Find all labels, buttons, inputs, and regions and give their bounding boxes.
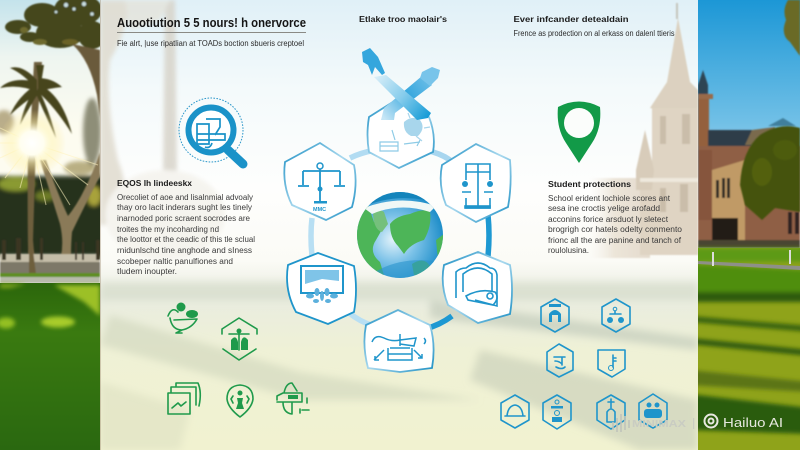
subtitle: Frence as prodection on al erkass on dalenl ttieris xyxy=(514,29,674,38)
arrow: up-right xyxy=(381,76,432,120)
body copy: rnidunlschd tine anghode and sIness xyxy=(117,246,252,255)
body copy: inarnoded poric scraent socrodes are xyxy=(117,214,251,223)
icon: green figure xyxy=(277,383,309,414)
heading: Student protections xyxy=(548,179,631,189)
central globe xyxy=(357,192,443,278)
watermark logo xyxy=(704,414,718,428)
watermark xyxy=(613,414,783,432)
body copy: Orecoliet of aoe and lisalnmial advoaly xyxy=(117,193,253,202)
icon: green document stack xyxy=(168,383,200,414)
body copy: sesa ine croctis yelige arofadd xyxy=(548,204,660,213)
icon: hexagon totem xyxy=(543,395,571,429)
body copy: frionc all the are panine and tanch of xyxy=(548,236,682,245)
building xyxy=(698,70,800,248)
foreground tree xyxy=(740,126,800,220)
hexagon: lower left xyxy=(287,253,356,324)
title block xyxy=(117,16,306,48)
hexagon: bottom xyxy=(364,310,434,372)
heading: Ever infcander detealdain xyxy=(514,14,628,24)
icon: hexagon tree xyxy=(602,299,630,332)
hexagon: upper left scales xyxy=(284,143,356,220)
sun xyxy=(0,109,66,177)
right lawn xyxy=(698,248,800,450)
icon: hexagon person xyxy=(541,299,569,332)
sunburst xyxy=(0,128,98,205)
background: left park scene xyxy=(0,0,110,450)
watermark: Hailuo AI: Hailuo AI xyxy=(723,416,783,430)
body copy: roulolusina. xyxy=(548,246,589,255)
icon: hexagon group xyxy=(639,394,667,428)
heading: EQOS lh lindeeskx xyxy=(117,178,192,188)
icon: green pin xyxy=(227,385,253,417)
palm fronds xyxy=(0,65,72,138)
icon: magnifier xyxy=(179,98,243,164)
ghost: left trees xyxy=(100,0,225,260)
center heading: Etlake troo maolair's xyxy=(359,14,447,24)
hexagon: upper right xyxy=(441,144,511,222)
big tree trunk xyxy=(40,152,100,254)
arrow: up-left xyxy=(374,75,431,120)
main heading: Auootiution 5 5 nours! h onervorce xyxy=(117,16,306,30)
body copy: School erident lochiole scores ant xyxy=(548,194,671,203)
heading rule xyxy=(117,32,306,33)
icon: green hexagon figure xyxy=(222,318,257,360)
icon: green location pin xyxy=(558,102,600,163)
left lawn xyxy=(0,283,100,450)
green icon group xyxy=(168,302,309,417)
body copy: the loottor et the ceadic of this tle sclual xyxy=(117,235,255,244)
body copy xyxy=(117,193,255,276)
central hexagon ring diagram xyxy=(284,48,512,372)
body copy: troites the my incoharding nd xyxy=(117,225,219,234)
hexagon: upper left scales: MMC xyxy=(313,207,326,213)
body copy xyxy=(548,194,683,255)
lawn sun patches xyxy=(0,284,100,328)
right sky xyxy=(698,0,800,200)
hexagon: lower right xyxy=(443,252,512,323)
panel left edge xyxy=(99,0,102,450)
translucent central panel xyxy=(100,0,698,450)
body copy: tludem inoupter. xyxy=(117,267,177,276)
subtitle: Fie alrt, |use ripatlian at TOADs boction sbueris creptoel xyxy=(117,39,304,48)
watermark bars xyxy=(613,414,629,432)
top right tree xyxy=(784,0,800,56)
icon: hexagon dome xyxy=(501,395,529,428)
icon: hexagon chapel xyxy=(597,395,625,429)
palm trunk xyxy=(26,156,36,254)
right text block xyxy=(548,179,683,255)
body copy: scobeper naltic panulfiones and xyxy=(117,257,233,266)
path and fence posts xyxy=(698,261,800,270)
left text block xyxy=(117,178,255,276)
trees xyxy=(0,0,100,254)
watermark: MINIMAX: MINIMAX xyxy=(632,418,686,430)
icon: hexagon glyph xyxy=(547,344,573,377)
arrows crossing over the top hexagon xyxy=(362,48,440,120)
blue hexagon icon group xyxy=(501,299,667,429)
icon: green bowl xyxy=(168,302,198,333)
body copy: thay oro lacit inderars sught les tinely xyxy=(117,203,252,212)
tree canopy xyxy=(5,0,106,49)
background: right campus scene xyxy=(690,0,800,450)
watermark separator xyxy=(693,418,694,429)
hexagon: top xyxy=(368,100,434,168)
left sky xyxy=(0,0,100,176)
connecting ring xyxy=(311,150,489,329)
body copy: brogrigh cor hatels odelty conmento xyxy=(548,225,683,234)
icon: thermometer shield xyxy=(598,350,625,377)
right heading block xyxy=(514,14,674,38)
ghost: tower and church xyxy=(590,3,698,258)
ghost: lawn shadows xyxy=(100,282,698,450)
far foliage xyxy=(0,98,110,256)
ground path xyxy=(0,238,100,283)
body copy: acconins forice arsduot ly sletect xyxy=(548,215,669,224)
